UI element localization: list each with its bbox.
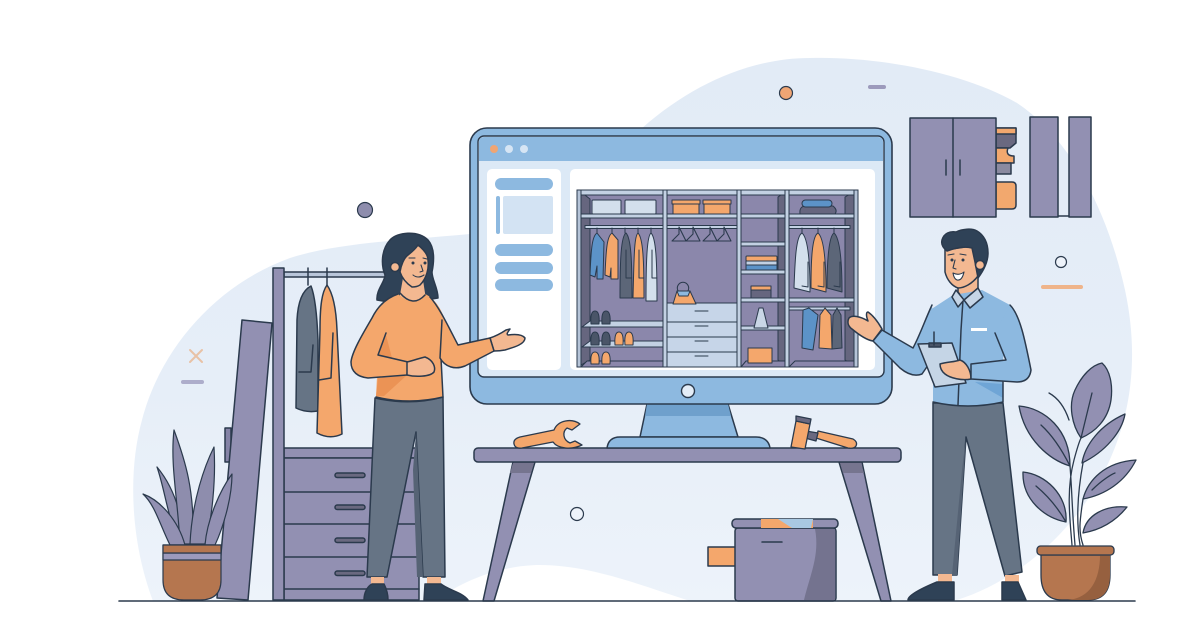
wrench on desk bbox=[514, 421, 582, 448]
woman ankles and shoes bbox=[364, 577, 468, 600]
storage box under desk bbox=[708, 519, 838, 601]
woman hair bbox=[377, 233, 438, 304]
man shirt bbox=[930, 290, 1010, 406]
man arm holding clipboard bbox=[940, 305, 1031, 382]
man pointing arm and hand bbox=[848, 305, 935, 375]
left potted plant bbox=[143, 430, 232, 600]
garment rack and drawers bbox=[273, 268, 419, 600]
woman trousers bbox=[367, 397, 445, 577]
background blob bbox=[133, 58, 1132, 601]
hammer on desk bbox=[791, 416, 857, 449]
closet drawers bbox=[667, 303, 737, 367]
closet side walls and dividers bbox=[577, 190, 858, 367]
ground line bbox=[119, 600, 1135, 602]
man collar bbox=[952, 288, 983, 308]
monitor stand bbox=[607, 404, 770, 448]
man trousers bbox=[933, 403, 1022, 576]
woman sweater bbox=[376, 293, 445, 401]
handbag bbox=[673, 282, 696, 304]
clipboard bbox=[918, 332, 966, 387]
woman left sleeve and hand bbox=[351, 294, 435, 378]
person: woman in orange sweater bbox=[351, 233, 525, 600]
closet shelves and rails bbox=[581, 214, 854, 367]
woman neck and face bbox=[390, 245, 428, 306]
hangers bbox=[672, 227, 731, 241]
closet storage boxes bbox=[592, 200, 836, 363]
closet design on screen bbox=[577, 190, 858, 367]
shoes on screen bbox=[591, 311, 633, 364]
wall cabinets bbox=[910, 117, 1091, 217]
desk bbox=[474, 448, 901, 601]
man ankles and shoes bbox=[908, 574, 1026, 600]
hanging clothes on screen bbox=[590, 228, 842, 350]
decorative marks bbox=[181, 85, 1083, 520]
leaning mirror panel bbox=[217, 320, 272, 600]
person: man in blue shirt bbox=[848, 229, 1031, 600]
hanging coats on rack bbox=[296, 268, 342, 437]
right potted plant bbox=[1019, 363, 1136, 600]
monitor bbox=[470, 128, 892, 404]
sidebar panel bbox=[487, 169, 561, 370]
man neck and head bbox=[942, 229, 988, 300]
woman right sleeve and hand bbox=[430, 297, 525, 368]
